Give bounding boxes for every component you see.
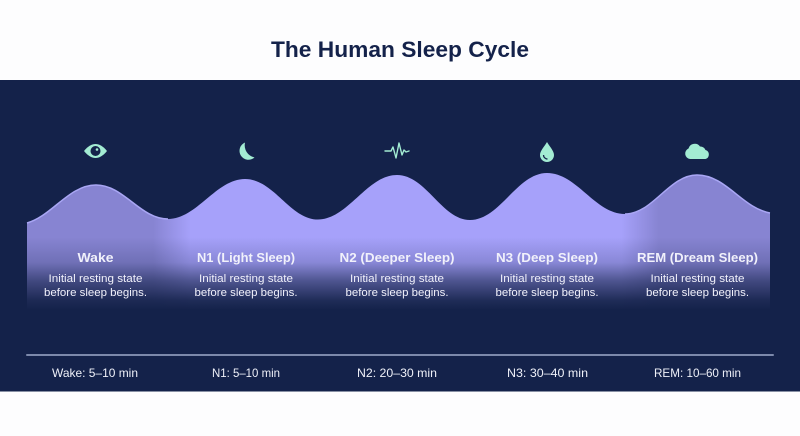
stage: N3: Initial resting state [500,273,594,285]
stage: N3: N3 (Deep Sleep) [496,250,598,265]
title: The Human Sleep Cycle [271,37,529,62]
timeline line [26,354,774,356]
durations: REM: 10–60 min [654,366,741,380]
stage: N1: before sleep begins. [194,287,298,299]
durations: N3: 30–40 min [507,366,588,380]
durations: N2: 20–30 min [357,366,437,380]
stage: REM [637,250,758,299]
stage: N3 [496,250,598,299]
stage: N3: before sleep begins. [496,287,598,299]
stage: REM: REM (Dream Sleep) [637,250,758,265]
stage: N1: N1 (Light Sleep) [197,250,295,265]
stage: N2: Initial resting state [350,273,444,285]
durations: N1: 5–10 min [212,366,280,380]
stage: N1: Initial resting state [199,273,293,285]
icon: eye [84,144,107,158]
stage: N2: N2 (Deeper Sleep) [340,250,454,265]
stage: N2 [340,250,454,299]
chart: sleep wave [27,170,770,310]
stage: Wake: before sleep begins. [44,287,147,299]
stage: REM: before sleep begins. [646,287,749,299]
stage: Wake: Initial resting state [48,273,142,285]
stage: N2: before sleep begins. [346,287,448,299]
icon: pulse [385,143,409,158]
icon: water drop [540,142,554,162]
icon: cloud [685,144,709,159]
durations: Wake: 5–10 min [52,366,138,380]
stage: Wake: Wake [78,250,114,265]
stage: N1 [194,250,298,299]
stage: Wake [44,250,147,299]
icon: moon [240,142,254,160]
panel: dark background [0,80,800,392]
durations [52,366,741,380]
stage: REM: Initial resting state [650,273,744,285]
